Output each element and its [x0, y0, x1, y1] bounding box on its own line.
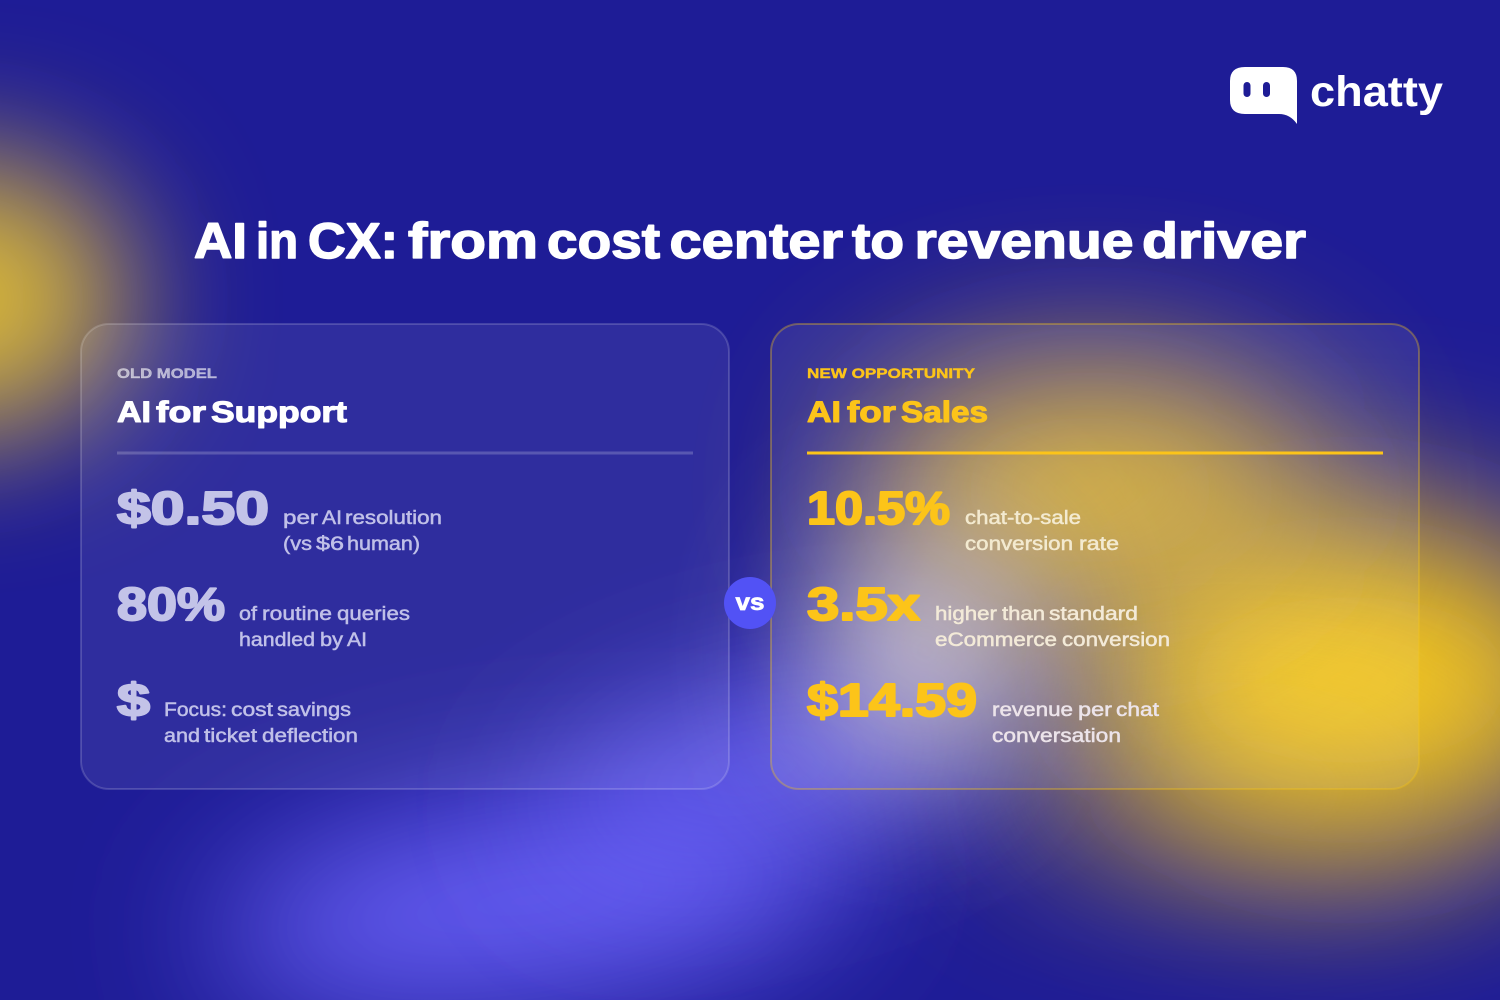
stat: focus: deflection	[262, 725, 358, 747]
panel heading: AI	[807, 396, 841, 429]
stat: $0.50: per	[283, 507, 319, 529]
stat: 80%: handled	[239, 629, 315, 651]
stat: $14.59: per	[1078, 699, 1113, 721]
title: in	[256, 213, 298, 269]
stat: 3.5x: 3.5x	[807, 578, 921, 630]
title: CX:	[308, 213, 398, 269]
panel heading: for	[847, 396, 896, 429]
stat: 3.5x: conversion	[1062, 629, 1170, 651]
stat: 80%: routine	[262, 603, 332, 625]
stat: 80%	[117, 578, 410, 651]
eyebrow: old model: OLD MODEL	[117, 365, 218, 381]
vs badge	[724, 577, 776, 629]
stat: focus: and	[164, 725, 200, 747]
stat: $14.59: $14.59	[807, 674, 977, 726]
stat: 3.5x: standard	[1049, 603, 1138, 625]
eyebrow: new opportunity: NEW OPPORTUNITY	[807, 365, 976, 381]
stat: 10.5%: conversion	[965, 533, 1073, 555]
stat: 80%: of	[239, 603, 258, 625]
stat: 80%: queries	[337, 603, 410, 625]
stat: 10.5%: rate	[1079, 533, 1119, 555]
stat: focus: Focus:	[164, 699, 227, 721]
stat: 10.5%: chat-to-sale	[965, 507, 1081, 529]
stat: $0.50: AI	[322, 507, 342, 529]
stat: $0.50: resolution	[345, 507, 442, 529]
title: cost	[547, 213, 660, 269]
panel heading: Support	[211, 396, 347, 429]
panel card	[81, 324, 729, 789]
stat: focus: cost	[231, 699, 274, 721]
title: revenue	[914, 213, 1134, 269]
stat: $14.59: revenue	[992, 699, 1073, 721]
panel heading: AI	[117, 396, 151, 429]
stat: 3.5x: eCommerce	[935, 629, 1057, 651]
stat: 10.5%: 10.5%	[807, 482, 950, 534]
title: from	[408, 213, 538, 269]
stat: 3.5x: higher	[935, 603, 998, 625]
title: driver	[1142, 213, 1306, 269]
panel: AI for Support	[81, 324, 729, 789]
stat: $14.59: chat	[1116, 699, 1160, 721]
stat: $14.59: conversation	[992, 725, 1121, 747]
stat: $0.50: (vs	[283, 533, 312, 555]
stat: $0.50: human)	[347, 533, 420, 555]
stat: $0.50: $6	[316, 533, 344, 555]
stat: focus: savings	[277, 699, 351, 721]
panel heading	[807, 396, 988, 429]
icon: chat bubble	[1230, 67, 1297, 124]
title: center	[670, 213, 843, 269]
vs badge: vs	[736, 589, 764, 615]
stat: 80%: AI	[347, 629, 367, 651]
panel heading: for	[156, 396, 206, 429]
stat: 80%: 80%	[117, 578, 225, 630]
panel heading	[117, 396, 347, 429]
stat: $0.50: $0.50	[117, 482, 269, 534]
title: to	[852, 213, 904, 269]
stat: focus: ticket	[204, 725, 258, 747]
panel card	[771, 324, 1419, 789]
stat: $14.59	[807, 674, 1160, 747]
logo wordmark: chatty	[1310, 68, 1443, 116]
stat: 10.5%	[807, 482, 1119, 555]
stat: 3.5x: than	[1002, 603, 1045, 625]
stat: 80%: by	[320, 629, 343, 651]
stat: $0.50	[117, 482, 442, 555]
title	[194, 213, 1306, 269]
stat: focus: $	[117, 674, 150, 726]
panel heading: Sales	[901, 396, 988, 429]
title: AI	[194, 213, 247, 269]
stat: focus	[117, 674, 358, 747]
panel: AI for Sales	[771, 324, 1419, 789]
logo: chatty	[1230, 67, 1443, 124]
stat: 3.5x	[807, 578, 1170, 651]
